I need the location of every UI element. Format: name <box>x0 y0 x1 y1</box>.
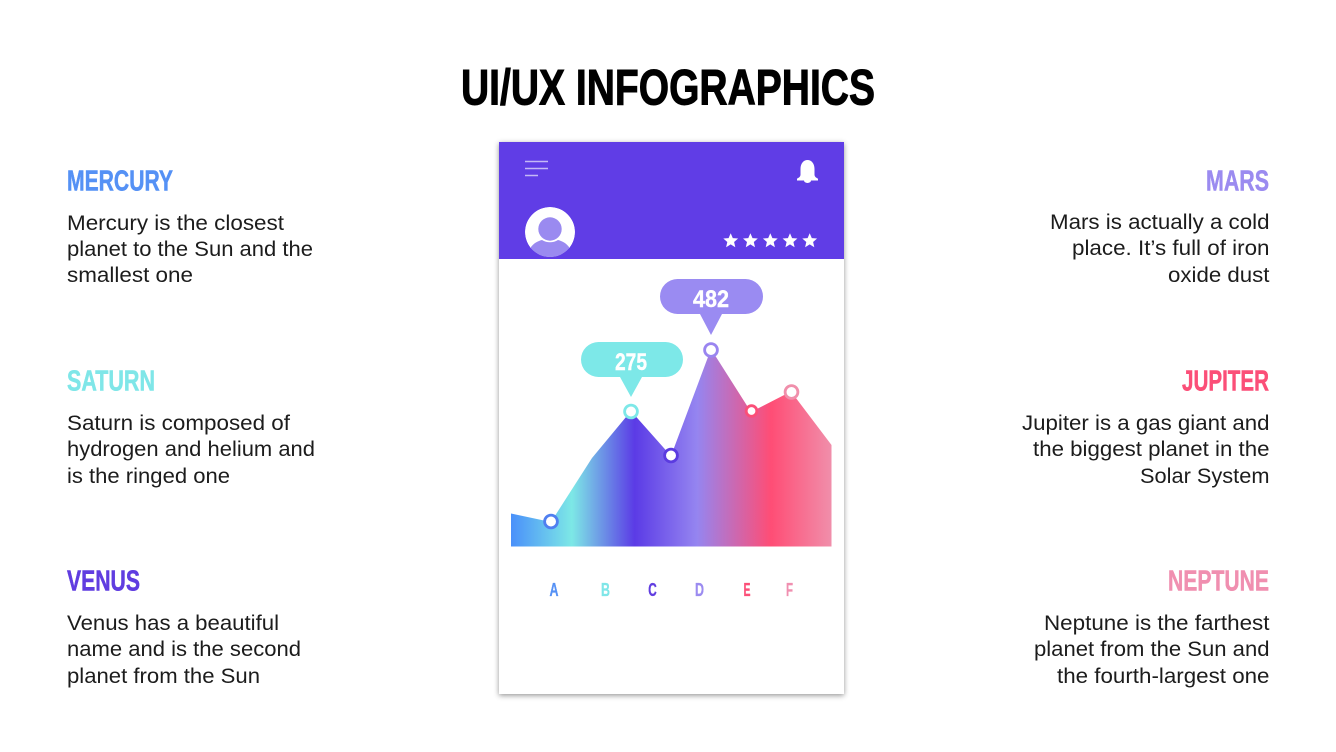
callout: 482: 482 <box>693 286 729 313</box>
callout: 482 <box>660 279 763 335</box>
callout: 275 <box>581 342 683 397</box>
heading: Mars: MARS <box>1206 166 1269 198</box>
panel: Neptune <box>1034 566 1270 688</box>
heading: Neptune: NEPTUNE <box>1168 566 1269 598</box>
panel: phone mockup <box>499 142 844 694</box>
text: Mars description <box>1050 210 1270 287</box>
text: Venus description <box>67 611 301 688</box>
text: Jupiter description: the biggest planet in the <box>1033 437 1270 461</box>
area chart <box>511 349 832 546</box>
axis labels: D <box>695 579 704 600</box>
text: Neptune description: the fourth-largest one <box>1057 664 1270 688</box>
heading: Mercury: MERCURY <box>67 166 173 198</box>
panel: Venus <box>67 566 301 688</box>
text: Venus description: name and is the second <box>67 637 301 661</box>
text: Mars description: Mars is actually a cold <box>1050 210 1270 234</box>
axis labels: E <box>744 579 750 600</box>
text: Mercury description: Mercury is the closest <box>67 211 284 235</box>
panel: Jupiter <box>1022 366 1270 488</box>
icon: rating stars <box>723 233 817 247</box>
icon: user avatar <box>525 207 575 260</box>
text: Saturn description <box>67 411 315 488</box>
axis labels: A <box>550 579 558 600</box>
icon: menu <box>525 162 548 176</box>
text: Jupiter description: Solar System <box>1140 464 1270 488</box>
callout: 275: 275 <box>615 349 647 376</box>
heading: Saturn: SATURN <box>67 366 155 398</box>
axis labels: B <box>601 579 610 600</box>
text: Venus description: planet from the Sun <box>67 664 260 688</box>
text: Mars description: oxide dust <box>1168 263 1270 287</box>
axis labels: C <box>648 579 657 600</box>
text: Saturn description: is the ringed one <box>67 464 230 488</box>
data points <box>545 344 798 528</box>
panel: Mercury <box>67 166 313 287</box>
text: Mercury description <box>67 211 313 287</box>
text: Mars description: place. It’s full of iron <box>1072 236 1270 260</box>
text: Jupiter description: Jupiter is a gas giant and <box>1022 411 1270 435</box>
text: Neptune description <box>1034 611 1270 688</box>
heading: Venus: VENUS <box>67 566 140 598</box>
heading: Jupiter: JUPITER <box>1182 366 1269 398</box>
text: Saturn description: Saturn is composed of <box>67 411 290 435</box>
text: Venus description: Venus has a beautiful <box>67 611 279 635</box>
icon: bell <box>797 160 818 183</box>
phone body <box>499 142 844 694</box>
text: Jupiter description <box>1022 411 1270 488</box>
panel: Mars <box>1050 166 1270 287</box>
title: UI/UX INFOGRAPHICS <box>461 60 875 116</box>
axis labels <box>550 579 793 600</box>
text: Neptune description: planet from the Sun and <box>1034 637 1270 661</box>
text: Mercury description: smallest one <box>67 263 193 287</box>
panel: Saturn <box>67 366 315 488</box>
text: Saturn description: hydrogen and helium and <box>67 437 315 461</box>
text: Neptune description: Neptune is the farthest <box>1044 611 1270 635</box>
phone header bar <box>499 142 844 259</box>
text: Mercury description: planet to the Sun and the <box>67 237 313 261</box>
axis labels: F <box>786 579 793 600</box>
